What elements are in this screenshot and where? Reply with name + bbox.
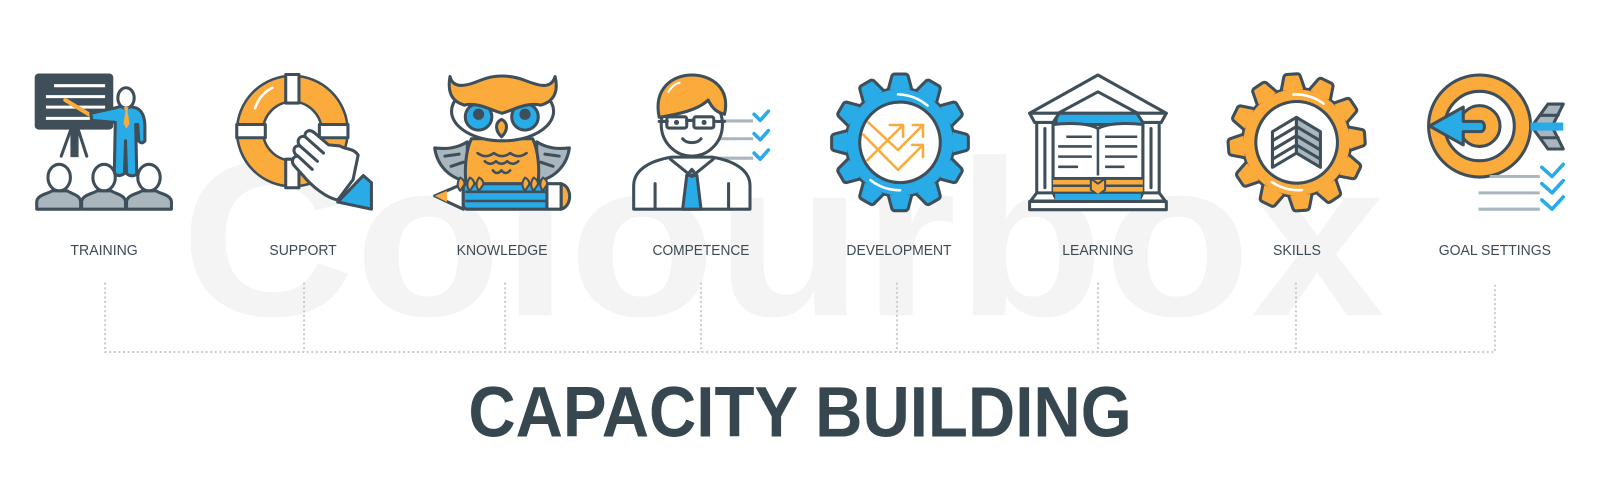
label: learning: LEARNING [1062,243,1134,259]
cuff [338,176,371,209]
label: goal settings: GOAL SETTINGS [1439,243,1551,259]
face [452,82,554,141]
head feathers [449,76,556,113]
head [658,75,726,156]
label: training: TRAINING [70,243,138,259]
gear body [1224,69,1370,215]
label: support: SUPPORT [269,243,337,259]
hand [292,131,358,200]
label: skills: SKILLS [1273,243,1321,259]
audience [37,164,171,209]
owl feet [458,178,547,191]
label: development: DEVELOPMENT [846,243,952,259]
presentation board [35,73,113,157]
pencil [435,184,570,209]
label: knowledge: KNOWLEDGE [457,243,548,259]
chevrons [1272,117,1320,167]
presenter [91,88,145,176]
checklist [1479,164,1563,209]
icon: orange gear skills [1224,69,1370,215]
dotted connector [105,283,1495,352]
wings [435,142,569,182]
body [465,139,539,186]
icon: blue gear development [832,74,968,211]
gear body [832,74,968,211]
icon: training presentation [35,73,171,209]
target [1429,75,1531,177]
icon: owl knowledge [435,76,570,209]
label: competence: COMPETENCE [653,243,750,259]
roof [1030,75,1166,113]
icon: person competence [634,75,768,209]
left column [1030,113,1059,194]
checklist lines [709,111,768,159]
icon: library learning [1030,75,1166,210]
entablature [1056,113,1143,124]
beak [497,119,507,137]
growth arrows [863,122,923,170]
watermark: Colourbox [181,115,1385,363]
arrow [1430,104,1563,149]
base [1030,193,1166,210]
torso [634,157,750,209]
open book [1053,124,1143,195]
icon: target goal settings [1429,75,1563,209]
title: CAPACITY BUILDING [468,373,1132,453]
lifebuoy ring [237,74,348,188]
icon: lifebuoy support [237,74,371,209]
right column [1137,113,1166,194]
